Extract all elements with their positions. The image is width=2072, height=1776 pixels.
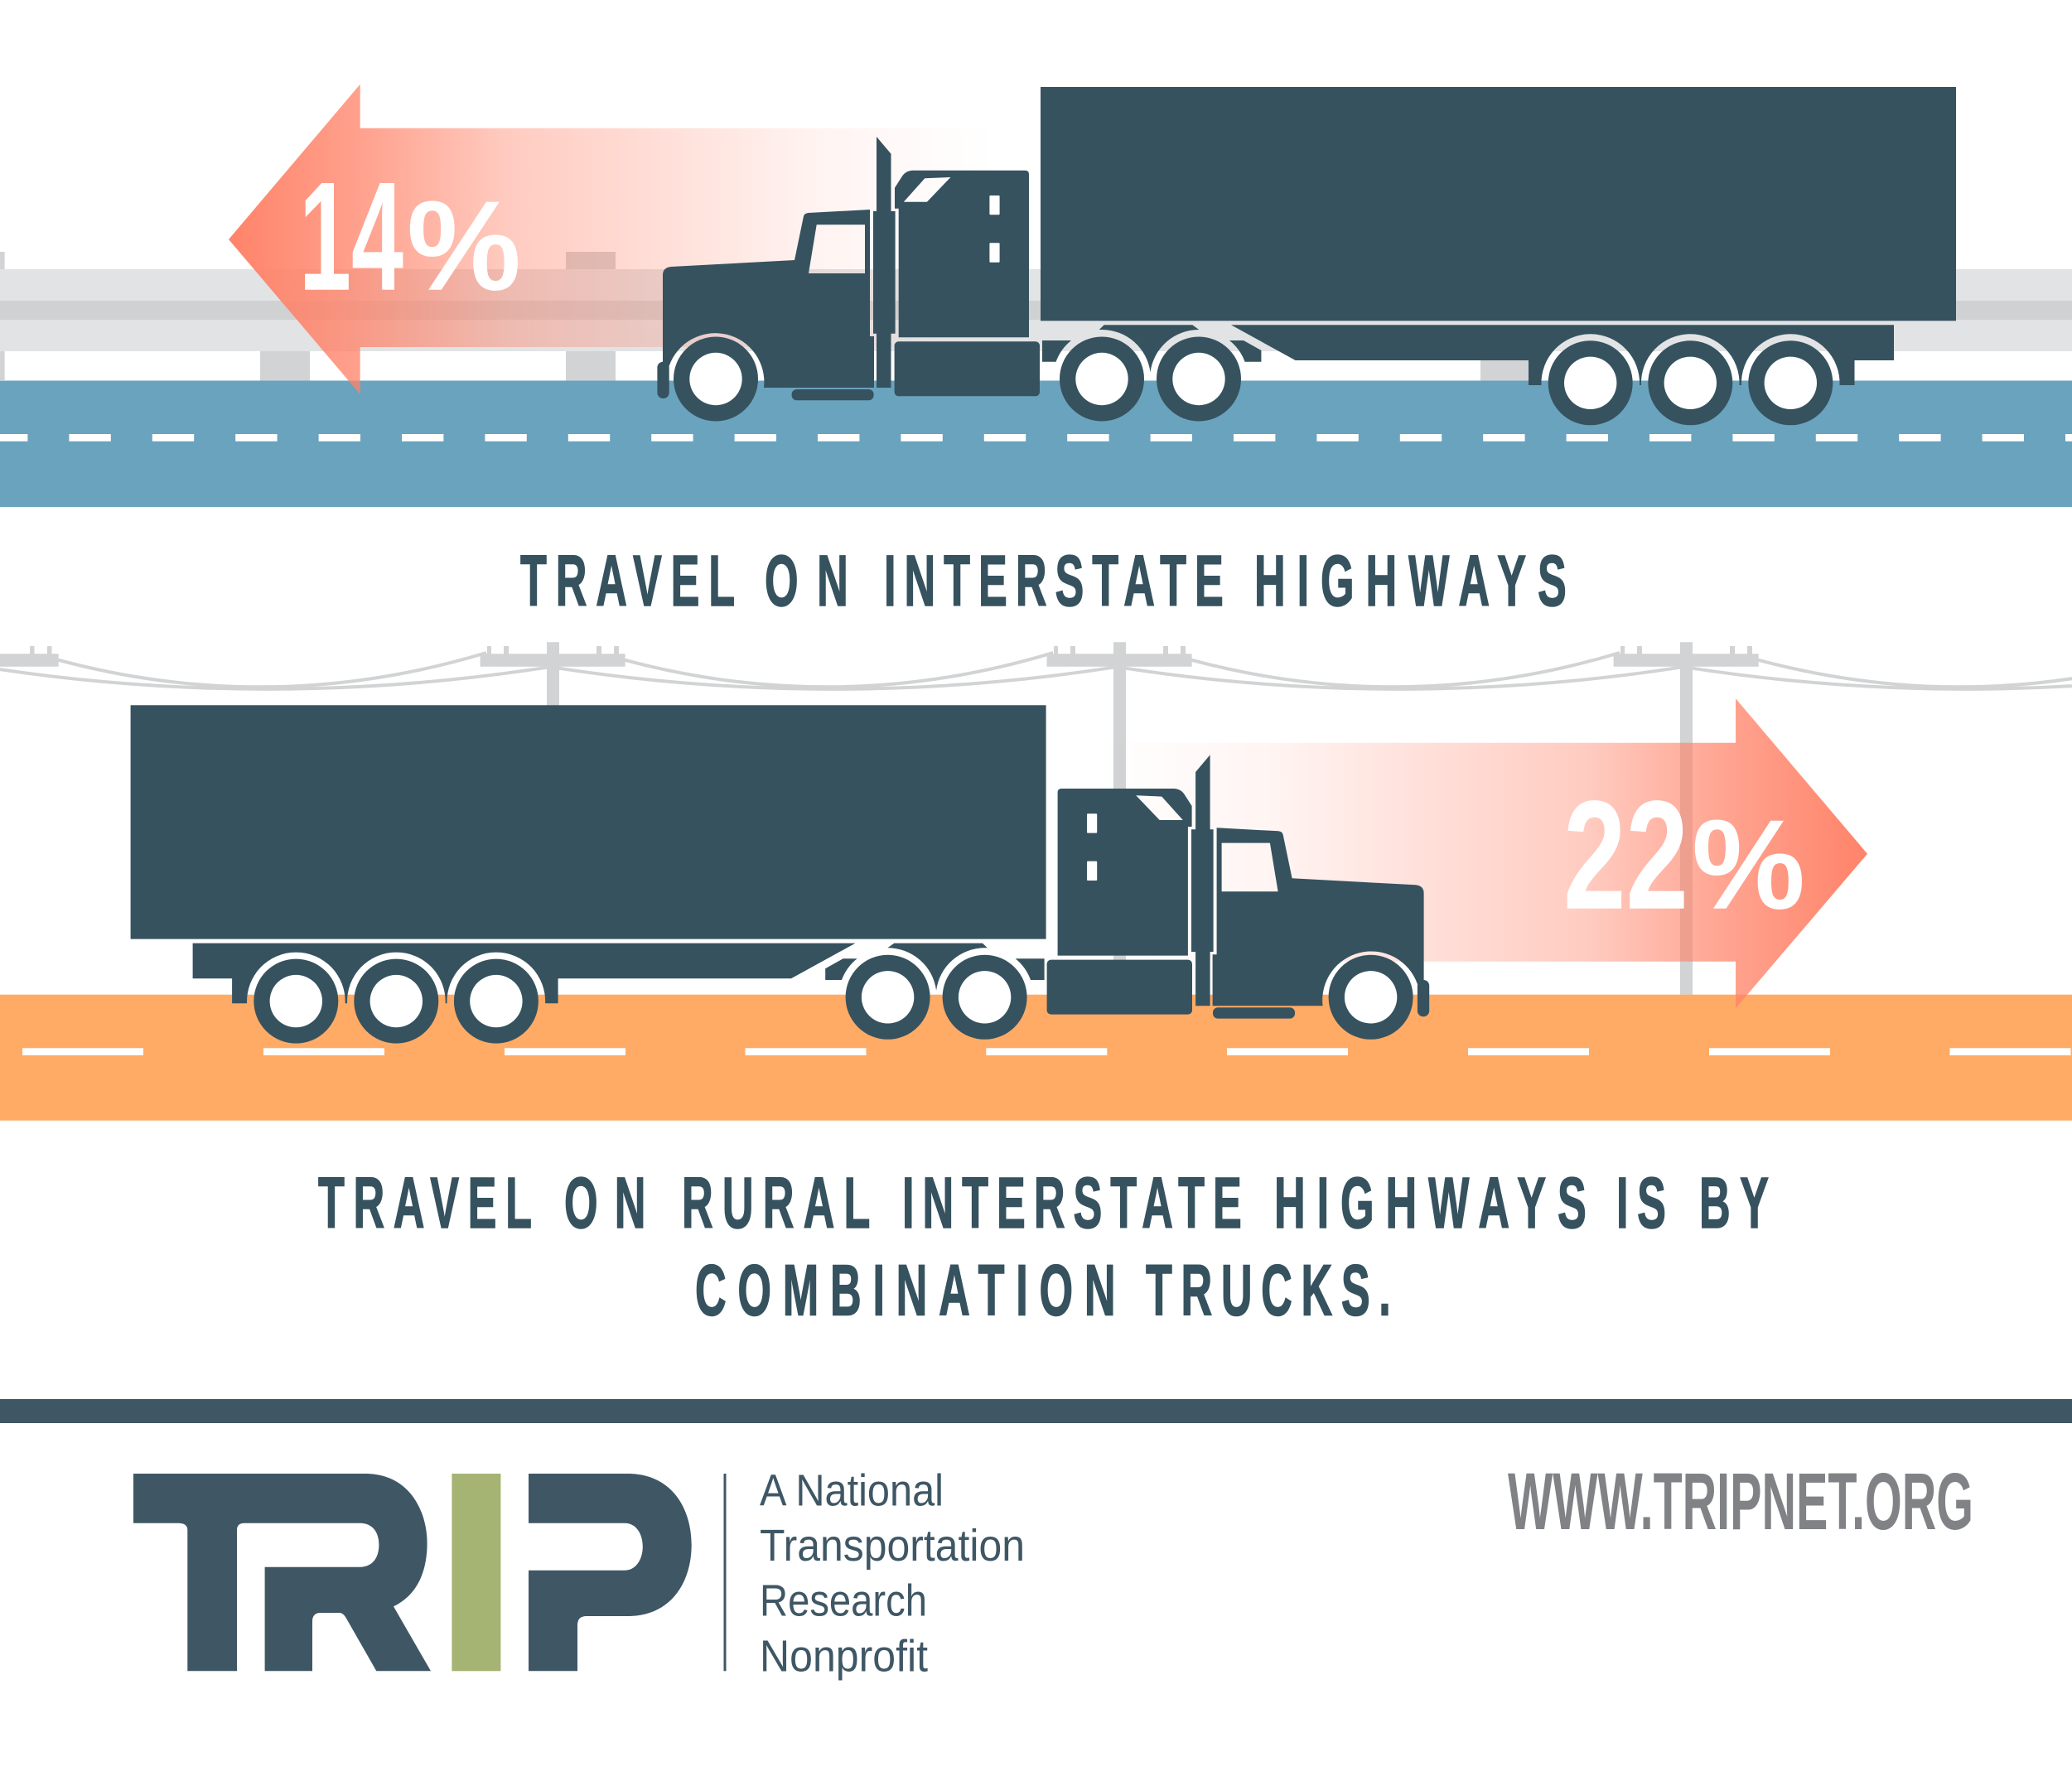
guard rail scene (0, 252, 2072, 381)
truck: interstate (657, 87, 1956, 425)
tagline: A National (760, 1465, 944, 1515)
heading: travel on interstate highways: INTERSTATE (884, 541, 1224, 621)
stat: 14%: % (407, 175, 521, 317)
heading: travel on interstate highways: ON (765, 541, 848, 621)
tagline: Transportation (760, 1521, 1025, 1571)
arrow: 14 percent, pointing left (229, 84, 994, 394)
step (792, 389, 874, 400)
sleeper cab (895, 171, 1029, 337)
wheels (674, 336, 1833, 425)
wheels (254, 955, 1413, 1044)
trailer chassis (1231, 325, 1894, 385)
step (1213, 1007, 1295, 1019)
exhaust stack (1191, 755, 1214, 1006)
tagline: Research (760, 1576, 927, 1626)
exhaust stack (873, 137, 896, 388)
mud flap rear of cab (1042, 340, 1071, 362)
hood and cab (1213, 828, 1424, 1006)
stat: 22%: % (1692, 794, 1805, 936)
letter P (529, 1474, 692, 1671)
utility poles and wires (0, 642, 2072, 995)
heading: travel on rural interstate highways is by combination trucks: RURAL (682, 1163, 870, 1243)
heading: travel on rural interstate highways is by combination trucks: TRUCKS. (1146, 1251, 1391, 1331)
footer divider bar (0, 1399, 2072, 1423)
front bumper (1418, 980, 1429, 1016)
pole remnant left (0, 646, 59, 667)
heading: travel on rural interstate highways is by combination trucks: IS (1616, 1163, 1666, 1243)
tagline: Nonprofit (760, 1631, 928, 1681)
tagline (760, 1465, 1025, 1681)
pole 1 (481, 642, 625, 828)
heading: travel on rural interstate highways is by combination trucks (318, 1163, 1769, 1331)
mud flap rear of cab (1016, 958, 1045, 980)
truck: rural (131, 705, 1429, 1044)
pole 3 (1614, 642, 1759, 995)
fuel tank (895, 341, 1040, 396)
heading: travel on rural interstate highways is by combination trucks: HIGHWAYS (1274, 1163, 1587, 1243)
heading: travel on rural interstate highways is by combination trucks: ON (564, 1163, 645, 1243)
letter I (452, 1474, 500, 1671)
heading: travel on interstate highways: TRAVEL (520, 541, 735, 621)
fifth wheel (1099, 325, 1199, 372)
heading: travel on rural interstate highways is by combination trucks: TRAVEL (318, 1163, 532, 1243)
hood and cab (663, 210, 874, 388)
stat: 14%: 14 (299, 150, 403, 323)
heading: travel on rural interstate highways is by combination trucks: COMBINATION (695, 1251, 1116, 1331)
logo separator (724, 1474, 726, 1671)
trailer box (131, 705, 1046, 939)
heading: travel on rural interstate highways is by combination trucks: BY (1699, 1163, 1769, 1243)
road: rural (0, 995, 2072, 1121)
mud flap behind drive axle (825, 958, 857, 980)
heading: travel on interstate highways (520, 541, 1567, 621)
fifth wheel (887, 943, 988, 991)
pole 2 (1047, 642, 1192, 994)
heading: travel on interstate highways: HIGHWAYS (1254, 541, 1567, 621)
road: interstate (0, 381, 2072, 507)
heading: travel on rural interstate highways is by combination trucks: INTERSTATE (902, 1163, 1242, 1243)
stat: 22%: 22 (1563, 769, 1688, 942)
front bumper (657, 362, 669, 398)
sleeper cab (1058, 789, 1192, 956)
arrow: 22 percent, pointing right (1102, 698, 1867, 1008)
trailer chassis (193, 943, 856, 1003)
fuel tank (1047, 960, 1192, 1015)
trailer box (1041, 87, 1956, 321)
mud flap behind drive axle (1229, 340, 1261, 362)
logo: TRIP (133, 1465, 1025, 1681)
letters T and R (133, 1474, 431, 1671)
